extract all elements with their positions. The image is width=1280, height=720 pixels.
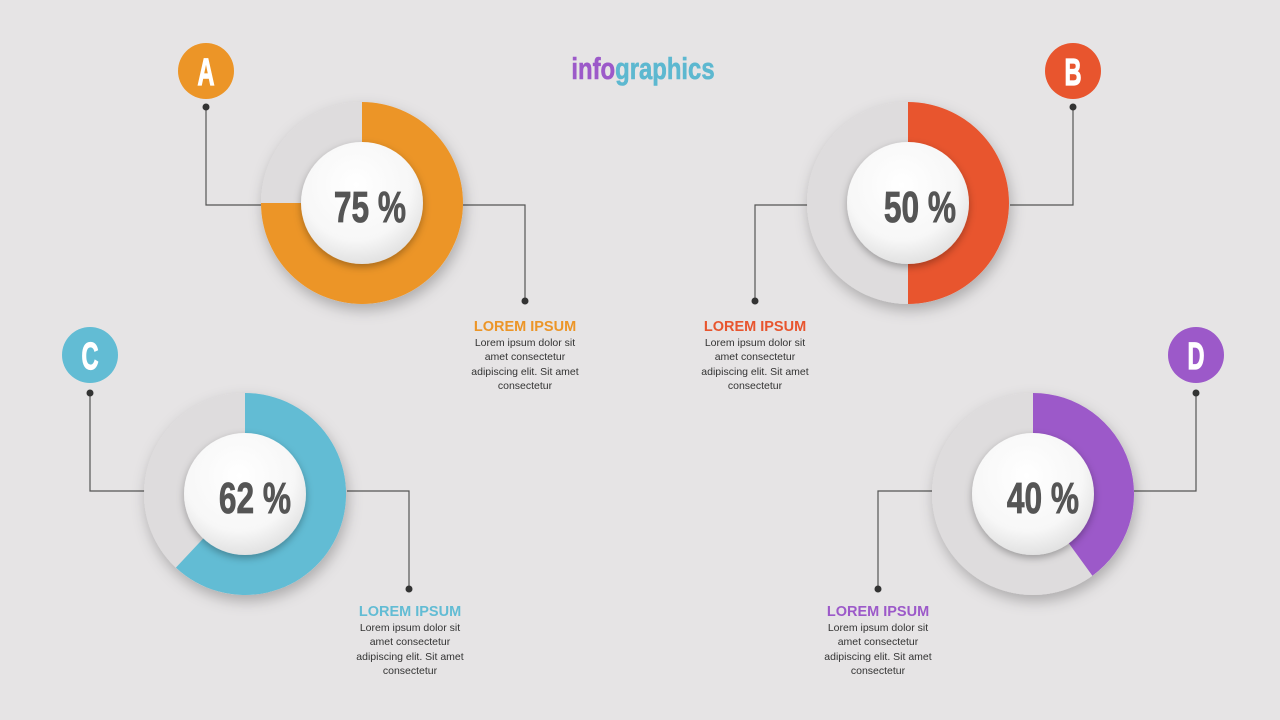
icon: letter D	[1168, 327, 1224, 383]
text block D: LOREM IPSUM	[827, 604, 929, 620]
text block B: consectetur	[728, 380, 783, 392]
text block A: consectetur	[498, 380, 553, 392]
donut chart B 50%: 50 %	[884, 183, 956, 232]
text block A: amet consectetur	[485, 351, 566, 363]
donut chart B 50%	[807, 102, 1009, 304]
icon: letter B: B	[1064, 50, 1082, 93]
panel: A	[178, 43, 579, 392]
text block C: LOREM IPSUM	[359, 604, 461, 620]
text block B: Lorem ipsum dolor sit	[705, 337, 805, 349]
text block C: adipiscing elit. Sit amet	[356, 651, 464, 663]
text block A: adipiscing elit. Sit amet	[471, 366, 579, 378]
text block C: Lorem ipsum dolor sit	[360, 622, 460, 634]
connector lines D	[874, 390, 1200, 592]
text block B: LOREM IPSUM	[704, 319, 806, 335]
connector lines B	[752, 104, 1076, 304]
donut chart D 40%: 40 %	[1007, 474, 1079, 523]
text block D: Lorem ipsum dolor sit	[828, 622, 928, 634]
icon: letter C: C	[81, 334, 99, 377]
donut chart A 75%	[261, 102, 463, 304]
text block B	[701, 319, 809, 392]
panel: D	[824, 327, 1224, 677]
icon: letter C	[62, 327, 118, 383]
icon: letter A	[178, 43, 234, 99]
text block C: consectetur	[383, 665, 438, 677]
connector lines C	[86, 390, 412, 592]
text block A: LOREM IPSUM	[474, 319, 576, 335]
title: infographics	[571, 51, 715, 86]
text block C: amet consectetur	[370, 636, 451, 648]
text block A: Lorem ipsum dolor sit	[475, 337, 575, 349]
donut chart A 75%: 75 %	[334, 183, 406, 232]
icon: letter B	[1045, 43, 1101, 99]
donut chart C 62%: 62 %	[219, 474, 291, 523]
text block D: adipiscing elit. Sit amet	[824, 651, 932, 663]
text block C	[356, 604, 464, 677]
connector lines A	[202, 104, 528, 304]
donut chart C 62%	[144, 393, 346, 595]
text block D	[824, 604, 932, 677]
text block B: adipiscing elit. Sit amet	[701, 366, 809, 378]
donut chart D 40%	[932, 393, 1134, 595]
text block A	[471, 319, 579, 392]
panel: B	[701, 43, 1101, 392]
text block B: amet consectetur	[715, 351, 796, 363]
text block D: consectetur	[851, 665, 906, 677]
icon: letter D: D	[1187, 334, 1205, 377]
icon: letter A: A	[197, 50, 215, 93]
text block D: amet consectetur	[838, 636, 919, 648]
panel: C	[62, 327, 464, 677]
